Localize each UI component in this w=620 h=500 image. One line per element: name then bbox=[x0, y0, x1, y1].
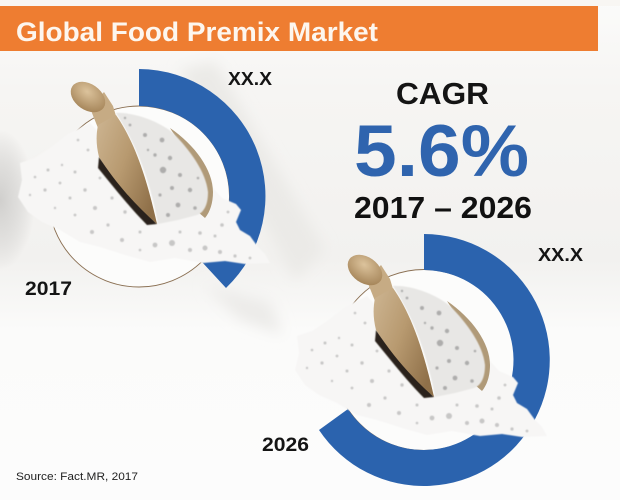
label 2017: 2017 bbox=[25, 279, 72, 300]
label 2026: 2026 bbox=[262, 435, 309, 456]
flour and scoop 2026 bbox=[295, 248, 547, 437]
CAGR block bbox=[354, 76, 532, 225]
label XX.X 2026: XX.X bbox=[538, 244, 584, 265]
header bar bbox=[0, 0, 620, 51]
donut 2017 bbox=[18, 69, 270, 288]
CAGR period: 2017 – 2026 bbox=[354, 190, 532, 225]
white disc 2026 bbox=[334, 270, 514, 450]
source: Source: Fact.MR, 2017 bbox=[16, 471, 138, 483]
blue arc 2026 bbox=[319, 234, 550, 486]
CAGR value: 5.6% bbox=[354, 111, 529, 192]
flour and scoop 2017 bbox=[18, 75, 270, 264]
title: Global Food Premix Market bbox=[16, 17, 378, 47]
blue arc 2017 bbox=[139, 69, 265, 288]
donut 2026 bbox=[295, 234, 550, 486]
white disc 2017 bbox=[48, 106, 230, 287]
CAGR label: CAGR bbox=[396, 76, 489, 111]
label XX.X 2017: XX.X bbox=[228, 68, 273, 89]
